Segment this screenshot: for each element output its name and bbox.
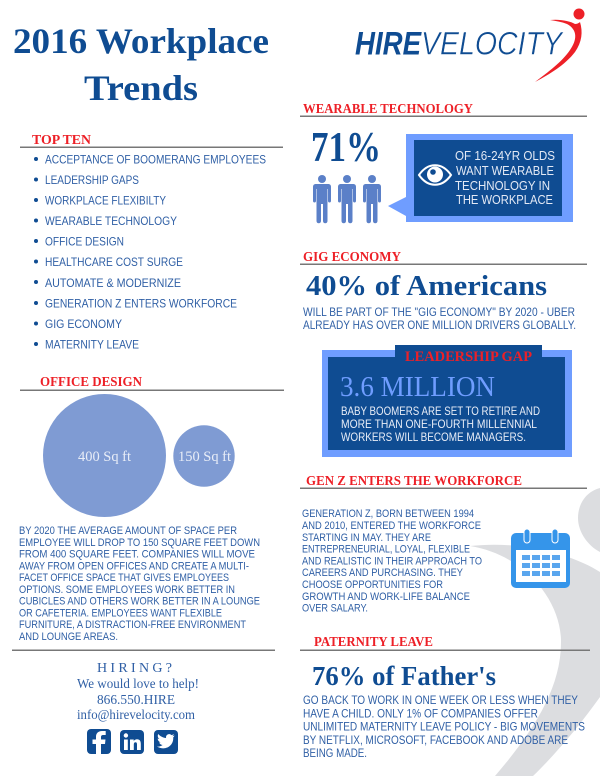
paternity leave text: HAVE A CHILD. ONLY 1% OF COMPANIES OFFER — [303, 706, 538, 720]
callout text: WANT WEARABLE — [456, 163, 554, 178]
stat: 76% of fathers: 76% of Father's — [312, 661, 496, 691]
contact block — [77, 661, 199, 723]
gen z text — [302, 508, 482, 614]
office design text: AWAY FROM OPEN OFFICES AND CREATE A MULTI- — [19, 560, 249, 572]
office design text: AND LOUNGE AREAS. — [19, 631, 118, 643]
leadership gap text: MORE THAN ONE-FOURTH MILLENNIAL — [341, 417, 537, 431]
circle: 150 sq ft — [173, 425, 235, 487]
gen z text: GENERATION Z, BORN BETWEEN 1994 — [302, 508, 474, 520]
contact block: H I R I N G ? — [97, 661, 172, 676]
background swoosh watermark — [470, 488, 600, 776]
contact block: 866.550.HIRE — [97, 693, 175, 708]
callout text: THE WORKPLACE — [456, 192, 553, 207]
panel: gen z — [300, 474, 587, 614]
panel: leadership gap — [322, 345, 572, 457]
icon: facebook — [87, 729, 111, 754]
leadership gap text — [341, 404, 540, 444]
icon: twitter — [154, 730, 178, 754]
gen z text: ENTREPRENEURIAL, LOYAL, FLEXIBLE — [302, 544, 470, 556]
logo: Hire Velocity — [355, 8, 584, 82]
top ten list: WORKPLACE FLEXIBILTY — [45, 194, 166, 208]
heading: gig economy: GIG ECONOMY — [303, 250, 401, 265]
title: 2016 Workplace — [13, 21, 269, 61]
panel: paternity leave — [300, 635, 590, 760]
top ten list: AUTOMATE & MODERNIZE — [45, 276, 181, 290]
gen z text: OVER SALARY. — [302, 602, 368, 614]
top ten list: LEADERSHIP GAPS — [45, 173, 139, 187]
leadership gap text: WORKERS WILL BECOME MANAGERS. — [341, 430, 526, 444]
icon: three people — [313, 175, 381, 223]
top ten list: MATERNITY LEAVE — [45, 338, 139, 352]
heading: leadership gap: LEADERSHIP GAP — [405, 349, 532, 365]
icon: calendar — [511, 529, 570, 588]
stat: 40% of Americans: 40% of Americans — [306, 270, 547, 302]
callout text: TECHNOLOGY IN — [455, 178, 550, 193]
office design text: BY 2020 THE AVERAGE AMOUNT OF SPACE PER — [19, 525, 237, 537]
gen z text: AND 2010, ENTERED THE WORKFORCE — [302, 520, 481, 532]
office design text: EMPLOYEE WILL DROP TO 150 SQUARE FEET DOWN — [19, 537, 260, 549]
heading: office design: OFFICE DESIGN — [40, 375, 142, 390]
gen z text: STARTING IN MAY. THEY ARE — [302, 532, 431, 544]
contact block: info@hirevelocity.com — [77, 708, 195, 723]
top ten list: HEALTHCARE COST SURGE — [45, 255, 183, 269]
heading: top ten: TOP TEN — [32, 133, 91, 148]
circle: 150 sq ft: 150 Sq ft — [178, 449, 231, 465]
panel: wearable technology — [300, 102, 587, 223]
heading: wearable technology: WEARABLE TECHNOLOGY — [303, 102, 473, 117]
circle: 400 sq ft: 400 Sq ft — [78, 449, 131, 465]
paternity leave text — [303, 693, 585, 760]
heading: gen z: GEN Z ENTERS THE WORKFORCE — [306, 474, 522, 489]
callout text — [455, 148, 555, 207]
stat: 3.6 million: 3.6 MILLION — [340, 371, 495, 403]
top ten list: GENERATION Z ENTERS WORKFORCE — [45, 296, 237, 310]
top ten list — [34, 152, 266, 352]
panel: office design — [19, 375, 284, 643]
office design text: FACET OFFICE SPACE THAT GIVES EMPLOYEES — [19, 572, 229, 584]
paternity leave text: BEING MADE. — [303, 746, 367, 760]
top ten list: GIG ECONOMY — [45, 317, 122, 331]
top ten list: WEARABLE TECHNOLOGY — [45, 214, 177, 228]
callout: 16-24yr olds — [388, 134, 573, 222]
panel: gig economy — [300, 250, 587, 332]
office design text: FURNITURE, A DISTRACTION-FREE ENVIRONMENT — [19, 619, 246, 631]
office design text: OPTIONS. SOME EMPLOYEES WORK BETTER IN — [19, 584, 235, 596]
icon: linkedin — [120, 730, 144, 754]
icon: eye — [419, 165, 451, 185]
leadership gap text: BABY BOOMERS ARE SET TO RETIRE AND — [341, 404, 540, 418]
office design text: CUBICLES AND OTHERS WORK BETTER IN A LOUNGE — [19, 596, 260, 608]
panel: top ten — [20, 133, 283, 352]
office design text: OR CAFETERIA. EMPLOYEES WANT FLEXIBLE — [19, 608, 222, 620]
office design text: FROM 400 SQUARE FEET. COMPANIES WILL MOVE — [19, 548, 255, 560]
title: Trends — [84, 68, 198, 108]
top ten list: ACCEPTANCE OF BOOMERANG EMPLOYEES — [45, 152, 266, 166]
office design text — [19, 525, 260, 643]
gig economy text — [303, 305, 576, 332]
gen z text: AND REALISTIC IN THEIR APPROACH TO — [302, 556, 482, 568]
callout text: OF 16-24YR OLDS — [455, 148, 555, 163]
title — [13, 21, 269, 108]
gen z text: GROWTH AND WORK-LIFE BALANCE — [302, 591, 470, 603]
top ten list: OFFICE DESIGN — [45, 234, 124, 248]
logo: Hire Velocity: VELOCITY — [421, 26, 564, 62]
gen z text: CHOOSE OPPORTUNITIES FOR — [302, 579, 443, 591]
contact block: We would love to help! — [77, 677, 199, 692]
circle: 400 sq ft — [43, 394, 166, 517]
heading: paternity leave: PATERNITY LEAVE — [314, 635, 433, 650]
logo: Hire Velocity: HIRE — [355, 26, 422, 62]
gen z text: CAREERS AND PURCHASING. THEY — [302, 567, 464, 579]
stat: 71%: 71% — [311, 125, 381, 171]
